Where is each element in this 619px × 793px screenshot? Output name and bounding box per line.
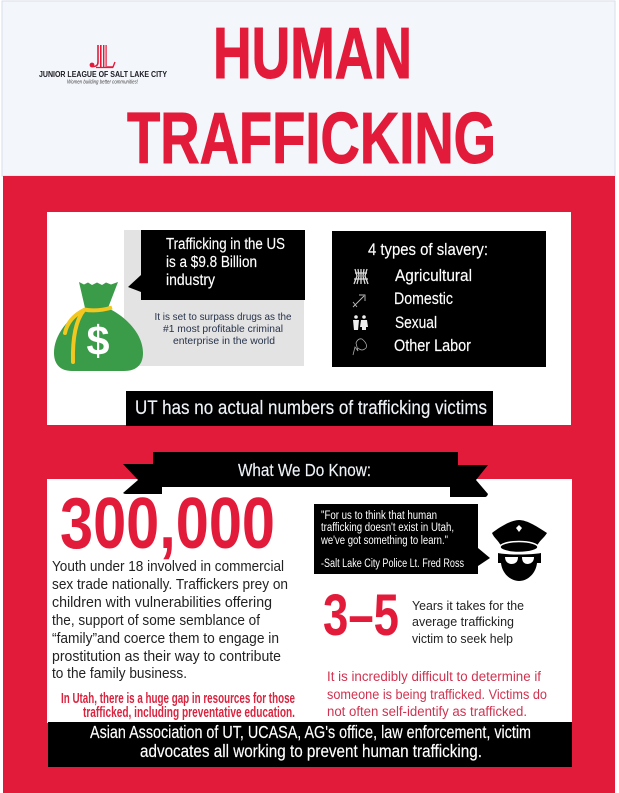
ribbon: What We Do Know xyxy=(123,452,488,497)
title: TRAFFICKING xyxy=(127,99,496,179)
banner: UT no numbers: UT has no actual numbers of trafficking victims xyxy=(135,398,487,419)
panel: 4 types of slavery: 4 types of slavery: xyxy=(368,241,488,259)
icon: money bag: $ xyxy=(86,317,110,364)
text: Utah resource gap: In Utah, there is a huge gap in resources for those xyxy=(61,691,295,707)
icon: people xyxy=(353,315,368,330)
panel: top white panel xyxy=(47,212,571,426)
banner: UT no numbers xyxy=(126,391,493,426)
icon: broom xyxy=(353,295,365,307)
panel: 4 types of slavery: Agricultural xyxy=(395,267,472,285)
text: youth description: Youth under 18 involved in commercial xyxy=(52,559,284,575)
text: Utah resource gap xyxy=(61,691,295,721)
text: youth description: to the family business. xyxy=(52,666,187,682)
text: surpass drugs: #1 most profitable criminal xyxy=(163,323,283,335)
logo: Junior League of Salt Lake City: JUNIOR LEAGUE OF SALT LAKE CITY xyxy=(39,70,168,79)
panel: 4 types of slavery: Other Labor xyxy=(394,337,471,355)
text: youth description: sex trade nationally. Traffickers prey on xyxy=(52,577,288,593)
quote callout: -Salt Lake City Police Lt. Fred Ross xyxy=(321,558,464,570)
bottom banner: partners: advocates all working to prevent human trafficking. xyxy=(140,741,482,761)
text: surpass drugs xyxy=(154,311,292,347)
icon: rope xyxy=(353,339,366,355)
callout: $9.8 billion: industry xyxy=(166,272,215,289)
quote callout: we've got something to learn." xyxy=(320,535,448,547)
text: years to seek help: average trafficking xyxy=(412,614,514,629)
logo: Junior League of Salt Lake City: Women building better communities! xyxy=(67,80,138,86)
text: difficult to determine xyxy=(327,669,547,719)
text: Utah resource gap: trafficked, including preventative education. xyxy=(83,705,295,721)
text: years to seek help: victim to seek help xyxy=(412,631,513,646)
bottom banner: partners xyxy=(48,722,572,767)
text: years to seek help: Years it takes for the xyxy=(412,598,524,613)
callout: $9.8 billion: Trafficking in the US xyxy=(166,236,285,253)
quote callout xyxy=(314,504,490,574)
panel: 4 types of slavery: Sexual xyxy=(395,314,437,332)
logo: Junior League of Salt Lake City xyxy=(39,45,168,86)
text: difficult to determine: It is incredibly difficult to determine if xyxy=(327,669,541,684)
bottom banner: partners: Asian Association of UT, UCASA, AG's office, law enforcement, victim xyxy=(90,722,531,742)
callout: $9.8 billion: is a $9.8 Billion xyxy=(166,254,257,271)
red background xyxy=(3,176,615,793)
text: difficult to determine: someone is being trafficked. Victims do xyxy=(327,687,547,702)
text: youth description xyxy=(52,559,288,682)
text: youth description: “family”and coerce them to engage in xyxy=(52,631,279,647)
panel: 4 types of slavery: Domestic xyxy=(394,290,453,308)
text: surpass drugs: It is set to surpass drugs as the xyxy=(154,311,292,323)
text: years to seek help xyxy=(412,598,524,646)
title: HUMAN xyxy=(213,14,412,94)
callout panel: gray box xyxy=(124,230,305,366)
icon: police officer xyxy=(492,520,547,581)
title xyxy=(127,14,496,179)
panel: lower white panel xyxy=(47,479,572,723)
text: difficult to determine: not often self-identify as trafficked. xyxy=(327,704,527,719)
callout: $9.8 billion xyxy=(128,230,305,300)
text: youth description: prostitution as their way to contribute xyxy=(52,649,281,665)
stat: 3-5 years: 3–5 xyxy=(323,583,399,648)
text: youth description: children with vulnerabilities offering xyxy=(52,595,272,611)
stat: 300,000: 300,000 xyxy=(60,484,275,564)
icon: wheat xyxy=(354,269,368,284)
icon: money bag xyxy=(54,282,143,371)
quote callout: "For us to think that human xyxy=(321,510,437,522)
ribbon: What We Do Know: What We Do Know: xyxy=(238,460,371,480)
header band xyxy=(2,1,615,176)
text: surpass drugs: enterprise in the world xyxy=(173,335,275,347)
quote callout: trafficking doesn't exist in Utah, xyxy=(321,522,454,534)
panel: 4 types of slavery xyxy=(332,231,546,367)
text: youth description: the, support of some semblance of xyxy=(52,613,261,629)
